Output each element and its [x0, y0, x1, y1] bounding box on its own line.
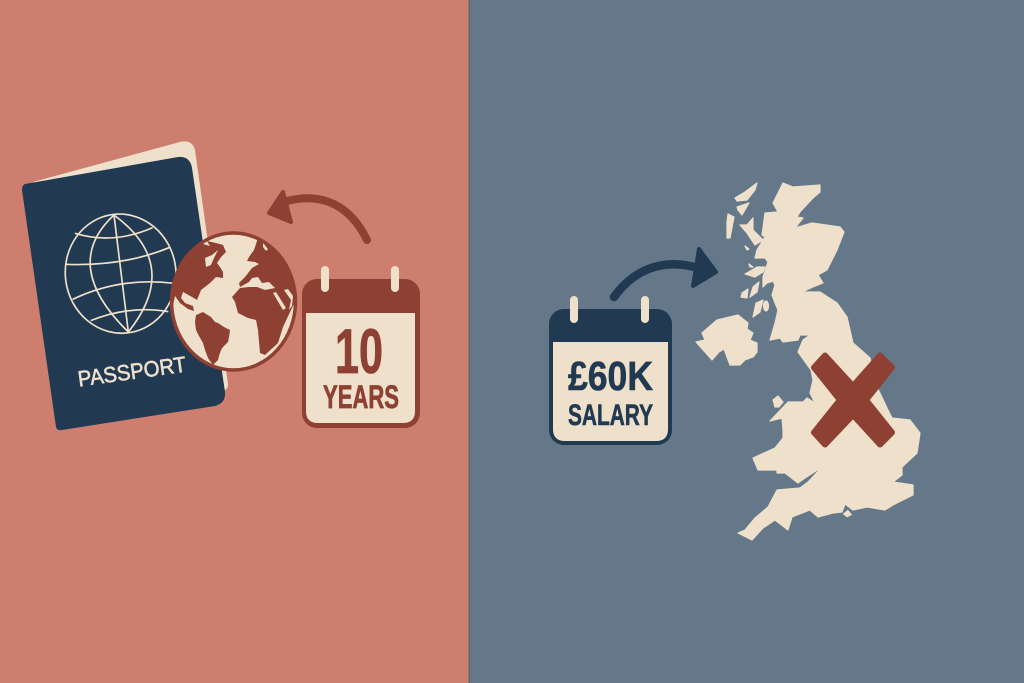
passport label: PASSPORT — [76, 352, 188, 392]
panel: left coral background — [0, 0, 469, 683]
number 10: 10 — [335, 317, 383, 387]
Red Sea — [273, 292, 286, 310]
icon: passport — [22, 141, 228, 430]
Eurasia and Africa — [232, 240, 294, 355]
arrow: curved forward arrow — [614, 249, 716, 297]
North America — [173, 241, 226, 311]
Scottish islands — [727, 183, 768, 317]
Great Britain — [738, 183, 920, 540]
icon: calendar 10 years — [302, 266, 420, 428]
icon: red cross over map — [814, 356, 892, 444]
icon: world globe — [170, 231, 298, 372]
South America — [195, 312, 230, 365]
Isle of Wight — [842, 509, 853, 518]
Scandinavian sliver — [263, 243, 268, 251]
Anglesey — [773, 396, 783, 407]
passport globe emblem — [58, 207, 184, 340]
panel: right slate background — [469, 0, 1024, 683]
amount: £60K — [568, 353, 653, 399]
arrow: curved back arrow — [269, 192, 367, 240]
passport cover — [22, 157, 225, 430]
map: United Kingdom and Ireland — [696, 183, 920, 540]
label salary: SALARY — [568, 399, 653, 432]
icon: calendar salary — [549, 296, 672, 445]
Ireland — [696, 315, 757, 365]
Hudson Bay — [205, 250, 218, 267]
label years: YEARS — [323, 379, 399, 415]
Arabia coast — [284, 289, 293, 310]
passport pages — [33, 141, 228, 390]
